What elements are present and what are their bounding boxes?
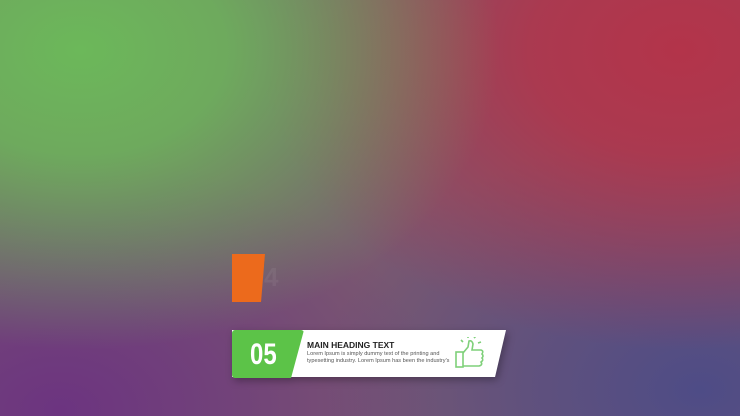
- card white body: [232, 330, 506, 377]
- icon: thumbs up: [455, 337, 484, 368]
- card 05: [231, 330, 510, 384]
- body text: Lorem Ipsum is simply dummy text of the printing and typesetting industry. Lorem Ipsum has been the industry's: [307, 351, 449, 364]
- green number block: [232, 330, 304, 378]
- number 05: 05: [250, 338, 277, 371]
- faded number 04: 4: [264, 262, 278, 292]
- orange tab: [232, 254, 265, 302]
- heading: MAIN HEADING TEXT: [307, 340, 394, 350]
